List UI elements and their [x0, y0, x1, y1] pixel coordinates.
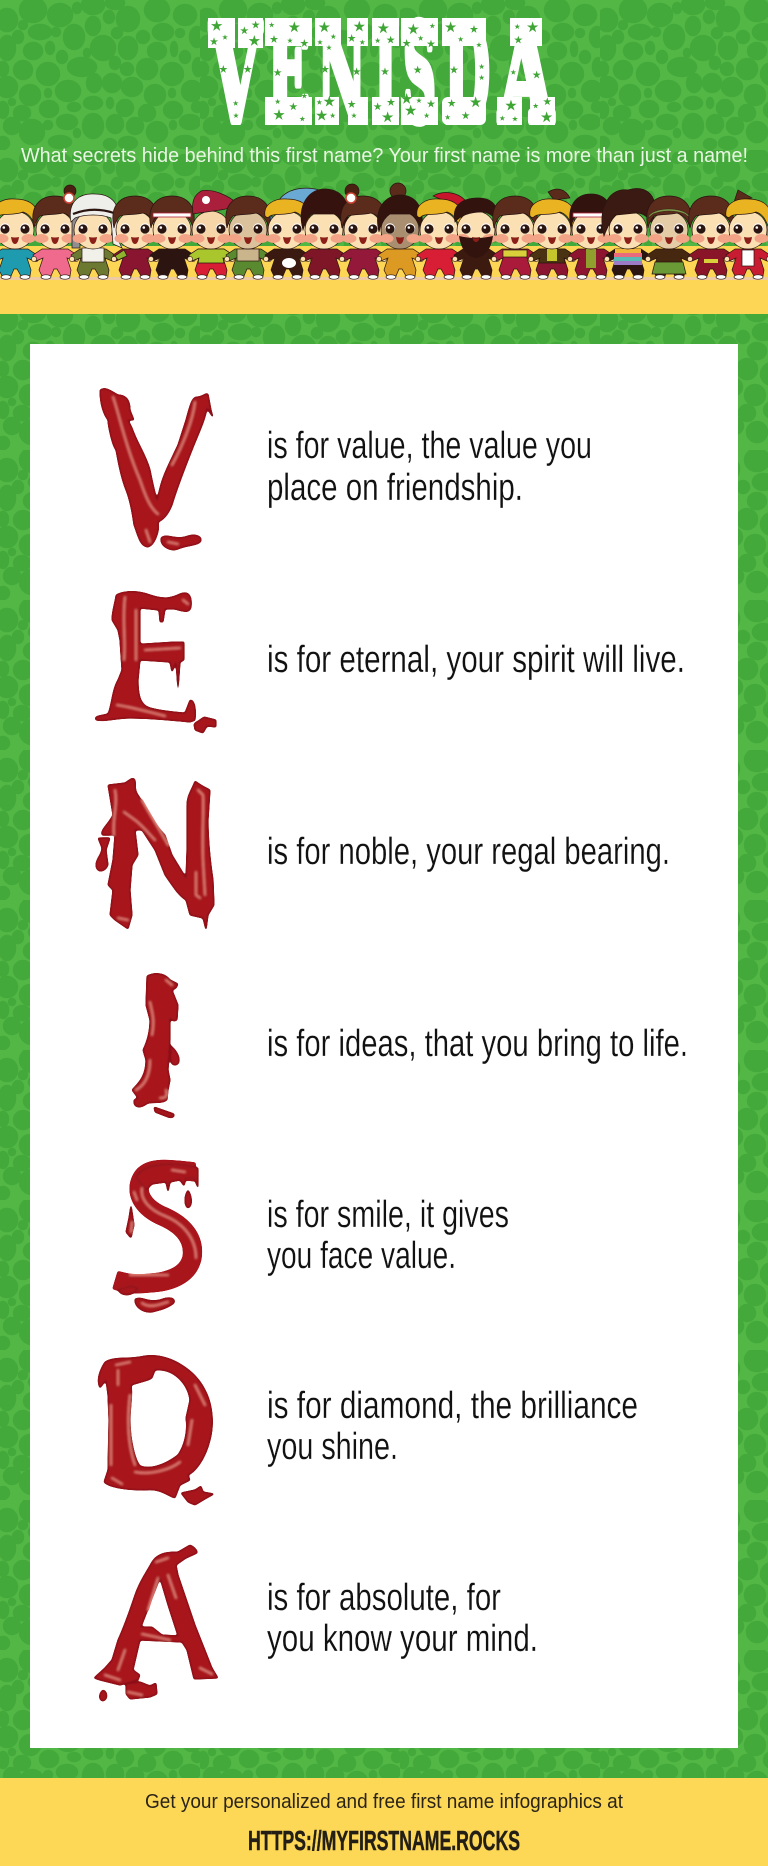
panel: white acrostic card [30, 344, 738, 1748]
text: V line: place on friendship. [267, 467, 523, 509]
title: VENISDA in star-filled western lettering [208, 0, 555, 153]
letter S in dripping blood [115, 1164, 198, 1312]
child 8: blond with blue cap, dark tunic [263, 188, 325, 279]
child 4: brown hair, maroon and green robe [111, 196, 159, 279]
text: S line [267, 1194, 509, 1277]
footer: website address: HTTPS://MYFIRSTNAME.ROCKS [248, 1825, 520, 1856]
child 5: patterned headband, black outfit [148, 196, 196, 279]
child 12: blond with red beret, red dress [415, 193, 465, 279]
illustration: row of children holding hands [0, 183, 768, 279]
child 16: headband, maroon robe with green panel [567, 194, 615, 279]
footer band [0, 1778, 768, 1866]
child 19: brown hair, maroon robe [687, 196, 735, 279]
text: D line: is for diamond, the brilliance [267, 1385, 638, 1427]
text: D line [267, 1385, 638, 1468]
letter E in dripping blood [95, 592, 216, 733]
letter D in dripping blood [98, 1356, 214, 1505]
child 7: tan face, grass skirt [224, 196, 278, 279]
child 10: flower in hair, maroon robe [339, 184, 387, 279]
child 9: tall dark hair, maroon suit [300, 189, 348, 279]
child 13: black hair and beard [452, 198, 500, 279]
text: D line: you shine. [267, 1426, 398, 1468]
subtitle: What secrets hide behind this first name? Your first name is more than just a name! [21, 144, 748, 167]
child 1: blond, blue overalls [0, 199, 39, 279]
child 18: leaf wreath, grass skirt, closed eyes [645, 196, 693, 279]
text: A line: you know your mind. [267, 1618, 538, 1660]
child 20: blond, red and white costume [724, 190, 768, 279]
child 15: blond flick, olive top, maroon legs [528, 189, 576, 279]
text: S line: is for smile, it gives [267, 1194, 509, 1236]
text: V line: is for value, the value you [267, 425, 592, 467]
text: S line: you face value. [267, 1235, 456, 1277]
letter N in dripping blood [96, 778, 214, 930]
letter V in dripping blood [100, 389, 213, 550]
text: V line [267, 425, 592, 509]
text: A line [267, 1577, 538, 1660]
footer: call to action: Get your personalized and free first name infographics at [145, 1791, 623, 1813]
child 11: dark curly hair, orange wrap [376, 183, 424, 279]
letter I in dripping blood [132, 974, 179, 1118]
child 14: brown hair, yellow top, polka-dot skirt [491, 196, 539, 279]
letter A in dripping blood [94, 1545, 218, 1701]
child 6: red hat, lime top, red skirt [187, 190, 238, 279]
banner: yellow ground band [0, 246, 768, 314]
child 17: spiky dark hair, rainbow striped top [602, 188, 655, 279]
child 2: flower in hair, pink kimono [31, 185, 79, 279]
child 3: white headdress, olive trousers [69, 194, 122, 279]
text: A line: is for absolute, for [267, 1577, 501, 1619]
